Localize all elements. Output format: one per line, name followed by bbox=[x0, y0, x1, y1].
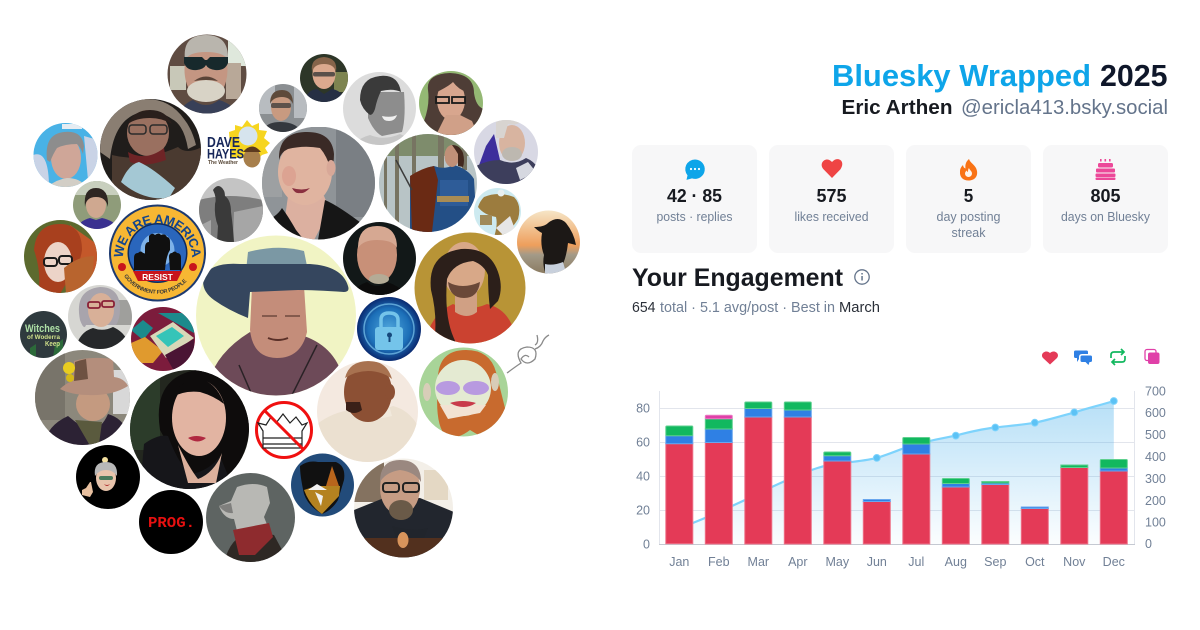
bar: Aug bbox=[942, 478, 969, 544]
month labels: Nov bbox=[1063, 555, 1086, 569]
stat label bbox=[936, 210, 1001, 240]
panel: day posting streak bbox=[906, 145, 1031, 253]
chart legend bbox=[1042, 349, 1160, 365]
avatar: Dave Hayes weather logo: HAYES bbox=[207, 146, 244, 162]
avatar: caricature with purple glasses bbox=[419, 347, 510, 438]
left axis labels bbox=[636, 402, 650, 552]
icon: flame bbox=[960, 159, 977, 180]
avatar: woman with grey-violet hair bbox=[68, 285, 132, 350]
decorative doodle: yarn knot bbox=[507, 335, 549, 373]
left axis labels: 20 bbox=[636, 504, 650, 518]
engagement summary: total · 5.1 avg/post · Best in bbox=[660, 300, 835, 316]
month labels: Mar bbox=[748, 555, 769, 569]
right axis labels: 400 bbox=[1145, 450, 1166, 464]
right axis labels: 0 bbox=[1145, 537, 1152, 551]
icon: replies bubbles bbox=[1074, 350, 1092, 365]
avatar: woman with dark curly hair bbox=[130, 370, 249, 489]
avatar: man with egg bbox=[354, 458, 454, 558]
avatar: Memoji with lightbulb bbox=[76, 445, 140, 509]
panel: likes received bbox=[769, 145, 894, 253]
month labels: Aug bbox=[945, 555, 967, 569]
avatar: red haired woman in leaves bbox=[24, 220, 98, 294]
user name and handle: @ericla413.bsky.social bbox=[961, 97, 1168, 119]
stat value: 42 · 85 bbox=[667, 186, 722, 206]
month labels bbox=[669, 555, 1125, 569]
month labels: Jun bbox=[867, 555, 887, 569]
right axis labels: 700 bbox=[1145, 384, 1166, 398]
month labels: Jan bbox=[669, 555, 689, 569]
right axis labels: 100 bbox=[1145, 516, 1166, 530]
right axis labels bbox=[1145, 384, 1166, 551]
month labels: Apr bbox=[788, 555, 808, 569]
avatar: Witches of Woderra Keep bbox=[20, 311, 67, 358]
avatar: man in white turtleneck bbox=[317, 361, 418, 464]
avatar: older man on sky bbox=[34, 123, 98, 187]
panel: posts and replies bbox=[632, 145, 757, 253]
bar: Sep bbox=[982, 482, 1009, 544]
stacked bars bbox=[666, 402, 1127, 544]
left axis labels: 60 bbox=[636, 436, 650, 450]
title: 2025 bbox=[1100, 58, 1168, 93]
icon: birthday cake bbox=[1096, 159, 1116, 180]
avatar: Witches of Woderra Keep: of Woderra bbox=[27, 334, 60, 341]
avatar: sunset silhouette bbox=[517, 210, 581, 276]
bar: Feb bbox=[705, 415, 732, 544]
avatar: man with sunglasses bbox=[167, 34, 248, 118]
avatar: man with purple hair and tie dye bbox=[474, 119, 540, 186]
stat label: posts · replies bbox=[656, 210, 732, 224]
bar: Oct bbox=[1021, 507, 1048, 544]
avatar: PROG. pixel logo bbox=[139, 490, 203, 554]
avatar: retro console art bbox=[131, 307, 195, 371]
avatar cluster bbox=[20, 34, 580, 562]
avatar: man with glasses and dark jacket bbox=[300, 54, 348, 104]
avatar: greyscale man bbox=[343, 72, 416, 148]
engagement summary: 654 bbox=[632, 300, 656, 316]
right axis labels: 600 bbox=[1145, 406, 1166, 420]
month labels: Jul bbox=[908, 555, 924, 569]
month labels: Feb bbox=[708, 555, 730, 569]
avatar: Dave Hayes weather logo: DAVE bbox=[207, 134, 240, 151]
avatar: bald man on black bbox=[343, 222, 416, 300]
stat value: 5 bbox=[964, 186, 973, 206]
engagement summary: March bbox=[839, 300, 880, 316]
stat value: 805 bbox=[1090, 186, 1120, 206]
avatar: We Are America badge: RESIST bbox=[142, 272, 174, 282]
right axis labels: 300 bbox=[1145, 472, 1166, 486]
avatar: woman in hood bbox=[100, 99, 202, 201]
icon: speech bubble bbox=[685, 159, 705, 180]
avatar: We Are America badge bbox=[109, 204, 206, 302]
left axis labels: 40 bbox=[636, 470, 650, 484]
avatar: no kings crown bbox=[256, 402, 312, 458]
avatar: young woman bbox=[73, 181, 121, 231]
avatar: Witches of Woderra Keep: Witches bbox=[25, 323, 60, 335]
avatar: raptor with goggles bbox=[474, 188, 521, 238]
title: Bluesky Wrapped bbox=[832, 58, 1091, 93]
avatar: black and white landscape bbox=[199, 178, 263, 242]
avatar: wizard in forest bbox=[379, 134, 477, 232]
avatar: main profile, man in wide brimmed hat bbox=[196, 235, 356, 398]
icon: likes heart bbox=[1042, 351, 1058, 364]
avatar: Dave Hayes weather logo bbox=[207, 120, 270, 168]
bar: Jul bbox=[903, 438, 930, 544]
heading: Your Engagement: Your Engagement bbox=[632, 264, 844, 292]
cumulative points bbox=[873, 398, 1117, 461]
stat label: likes received bbox=[794, 210, 869, 224]
month labels: Oct bbox=[1025, 555, 1045, 569]
avatar: woman with short hair in black bbox=[262, 127, 376, 240]
bar: May bbox=[824, 452, 851, 544]
avatar: Witches of Woderra Keep: Keep bbox=[45, 341, 60, 348]
icon: repost arrows bbox=[1111, 349, 1125, 365]
bar: Mar bbox=[745, 402, 772, 544]
left axis labels: 0 bbox=[643, 538, 650, 552]
cumulative line bbox=[679, 401, 1114, 529]
right axis labels: 200 bbox=[1145, 494, 1166, 508]
month labels: May bbox=[825, 555, 850, 569]
stat value: 575 bbox=[816, 186, 846, 206]
user name and handle: Eric Arthen bbox=[842, 97, 952, 119]
bar: Apr bbox=[784, 402, 811, 544]
avatar: digital padlock bbox=[357, 297, 421, 361]
icon: info bbox=[855, 270, 869, 284]
gridlines bbox=[659, 391, 1134, 544]
cumulative area bbox=[679, 401, 1114, 544]
avatar: We Are America badge: WE ARE AMERICA bbox=[114, 214, 201, 258]
left axis labels: 80 bbox=[636, 402, 650, 416]
bar: Dec bbox=[1100, 460, 1127, 544]
month labels: Sep bbox=[984, 555, 1006, 569]
icon: heart bbox=[822, 159, 842, 178]
avatar: woman in straw hat with daffodil bbox=[35, 350, 131, 446]
panel: days on Bluesky bbox=[1043, 145, 1168, 253]
stat label: day posting bbox=[936, 210, 1001, 224]
icon: quote squares bbox=[1145, 350, 1160, 364]
avatar: Yellowstone badge bbox=[291, 453, 354, 517]
avatar: long-haired man in red bbox=[414, 232, 526, 345]
avatar: small man in grey bbox=[259, 84, 307, 134]
month labels: Dec bbox=[1103, 555, 1125, 569]
stat label: days on Bluesky bbox=[1061, 210, 1151, 224]
avatar: We Are America badge: GOVERNMENT FOR PEOPLE bbox=[124, 274, 187, 294]
bar: Jun bbox=[863, 500, 890, 544]
stat label: streak bbox=[952, 226, 986, 240]
right axis labels: 500 bbox=[1145, 428, 1166, 442]
avatar: woman with dark hair and glasses bbox=[419, 71, 484, 135]
user name and handle bbox=[842, 97, 1168, 119]
avatar: wolf in plaid scarf bbox=[206, 473, 296, 565]
bar: Nov bbox=[1061, 465, 1088, 544]
avatar: PROG. pixel logo: PROG. bbox=[148, 515, 195, 532]
avatar: Dave Hayes weather logo: The Weather bbox=[208, 160, 238, 166]
combined chart: monthly engagement bbox=[636, 384, 1166, 569]
bar: Jan bbox=[666, 426, 693, 544]
